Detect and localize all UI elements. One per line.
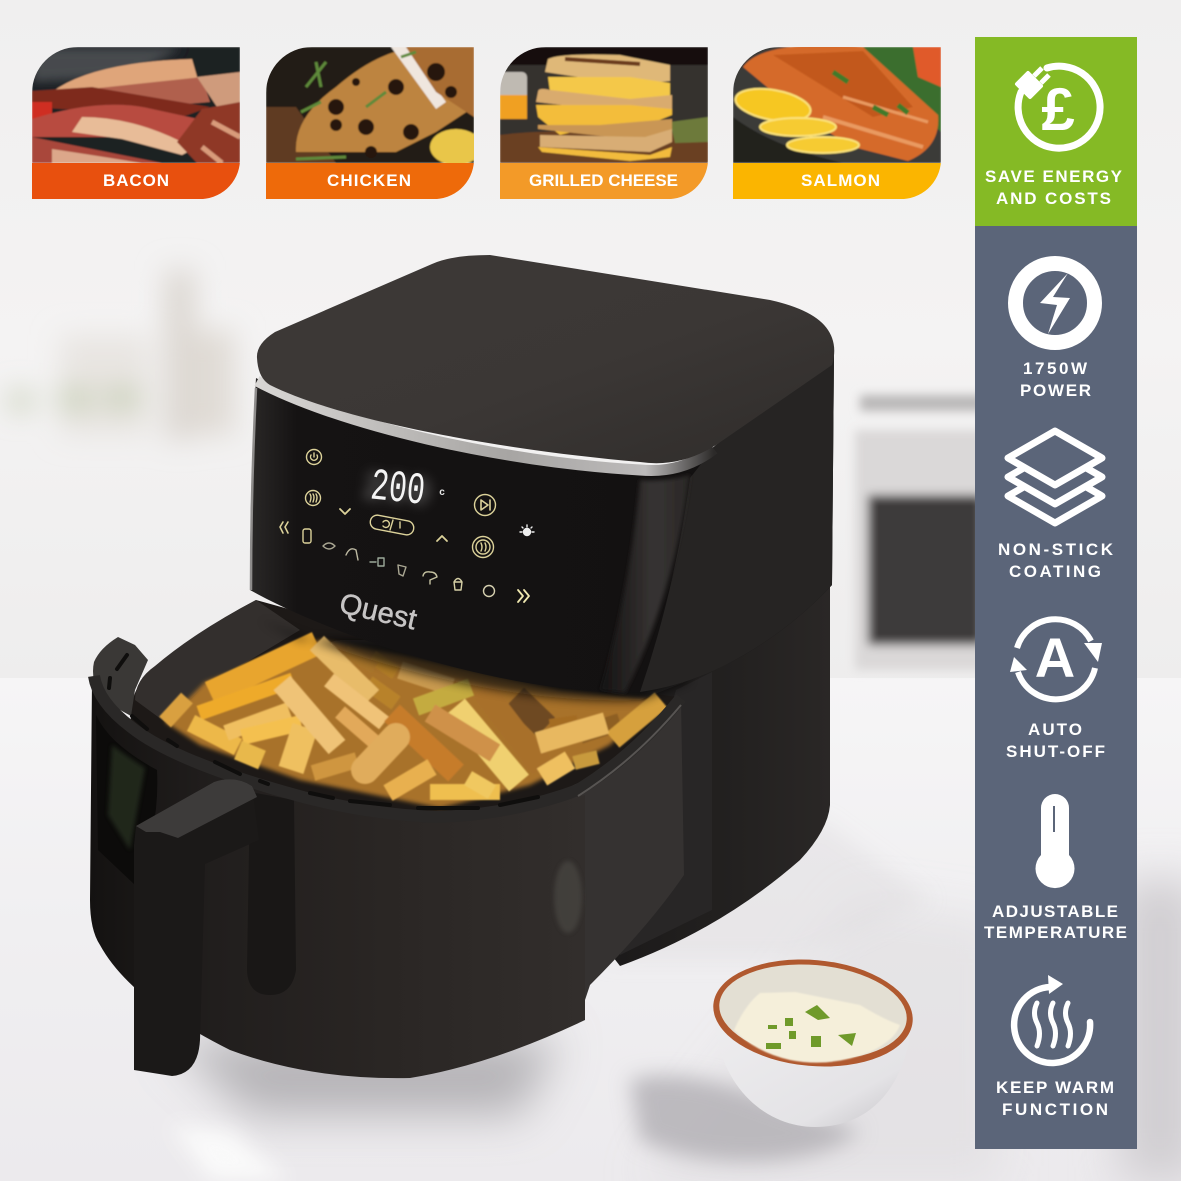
basket latch reflection (554, 861, 582, 933)
panel: features (975, 226, 1137, 1149)
text: auto shut-off (1006, 720, 1105, 761)
text: non-stick: NON-STICK (998, 540, 1114, 559)
chicken photo (266, 47, 482, 165)
label: SALMON (801, 171, 880, 190)
sauce bowl (709, 951, 917, 1127)
text: keep warm: KEEP WARM (996, 1078, 1114, 1097)
label: CHICKEN (327, 171, 411, 190)
basket front (90, 680, 585, 1078)
text: keep warm (996, 1078, 1114, 1119)
icon: keep warm (1014, 975, 1090, 1063)
shadow under control panel (260, 620, 690, 700)
text: non-stick: COATING (1009, 562, 1101, 581)
lid (257, 255, 834, 463)
herbs (766, 1005, 856, 1049)
chrome trim (257, 381, 714, 471)
grilled cheese photo (500, 47, 708, 163)
text: power: POWER (1020, 381, 1091, 400)
display: temperature: 200 (360, 467, 433, 516)
icon: plug and pound (1017, 66, 1100, 148)
text: temperature: ADJUSTABLE (992, 902, 1118, 921)
text: power: 1750W (1023, 359, 1088, 378)
terracotta rim (709, 951, 917, 1075)
unit label: c (439, 487, 445, 498)
sauce (734, 992, 900, 1063)
control panel housing (250, 355, 834, 693)
text: temperature: TEMPERATURE (984, 923, 1127, 942)
text: keep warm: FUNCTION (1002, 1100, 1108, 1119)
salmon photo (733, 45, 941, 163)
brand logo: Quest (336, 588, 420, 636)
fries bed (165, 640, 655, 808)
icon: auto arrows: A (1035, 626, 1075, 689)
icon: thermometer (1036, 794, 1075, 888)
basket interior (131, 600, 677, 815)
basket left gloss (96, 715, 157, 885)
handle (134, 779, 259, 1076)
text: SAVE ENERGY (985, 167, 1123, 186)
food card: grilled cheese (500, 47, 708, 199)
control icons (280, 450, 534, 602)
air fryer (90, 255, 834, 1078)
text: power (1020, 359, 1091, 400)
bacon photo (32, 47, 240, 163)
text: auto shut-off: SHUT-OFF (1006, 742, 1105, 761)
basket dark window (247, 792, 296, 995)
icon: layers (1008, 431, 1102, 523)
bowl interior (715, 957, 911, 1067)
icon: auto arrows (1010, 619, 1102, 699)
panel: save energy (975, 37, 1137, 226)
basket right side wall (550, 700, 684, 1000)
bowl body (714, 1018, 912, 1127)
text: auto shut-off: AUTO (1028, 720, 1082, 739)
icon: power bolt (1016, 264, 1094, 342)
basket inner left wall (135, 600, 300, 722)
text: non-stick (998, 540, 1114, 581)
text: temperature (984, 902, 1127, 942)
food card: chicken (266, 47, 482, 199)
icon: plug and pound: £ (1041, 76, 1075, 143)
text: AND COSTS (996, 189, 1111, 208)
food card: bacon (32, 47, 240, 199)
drawer opening (610, 672, 712, 955)
display: temperature: 200 (368, 462, 427, 518)
fries (165, 643, 661, 793)
food card: salmon (733, 45, 941, 199)
basket rim (93, 637, 681, 817)
label: GRILLED CHEESE (529, 171, 678, 190)
main body lower section (600, 585, 830, 966)
label: BACON (103, 171, 169, 190)
